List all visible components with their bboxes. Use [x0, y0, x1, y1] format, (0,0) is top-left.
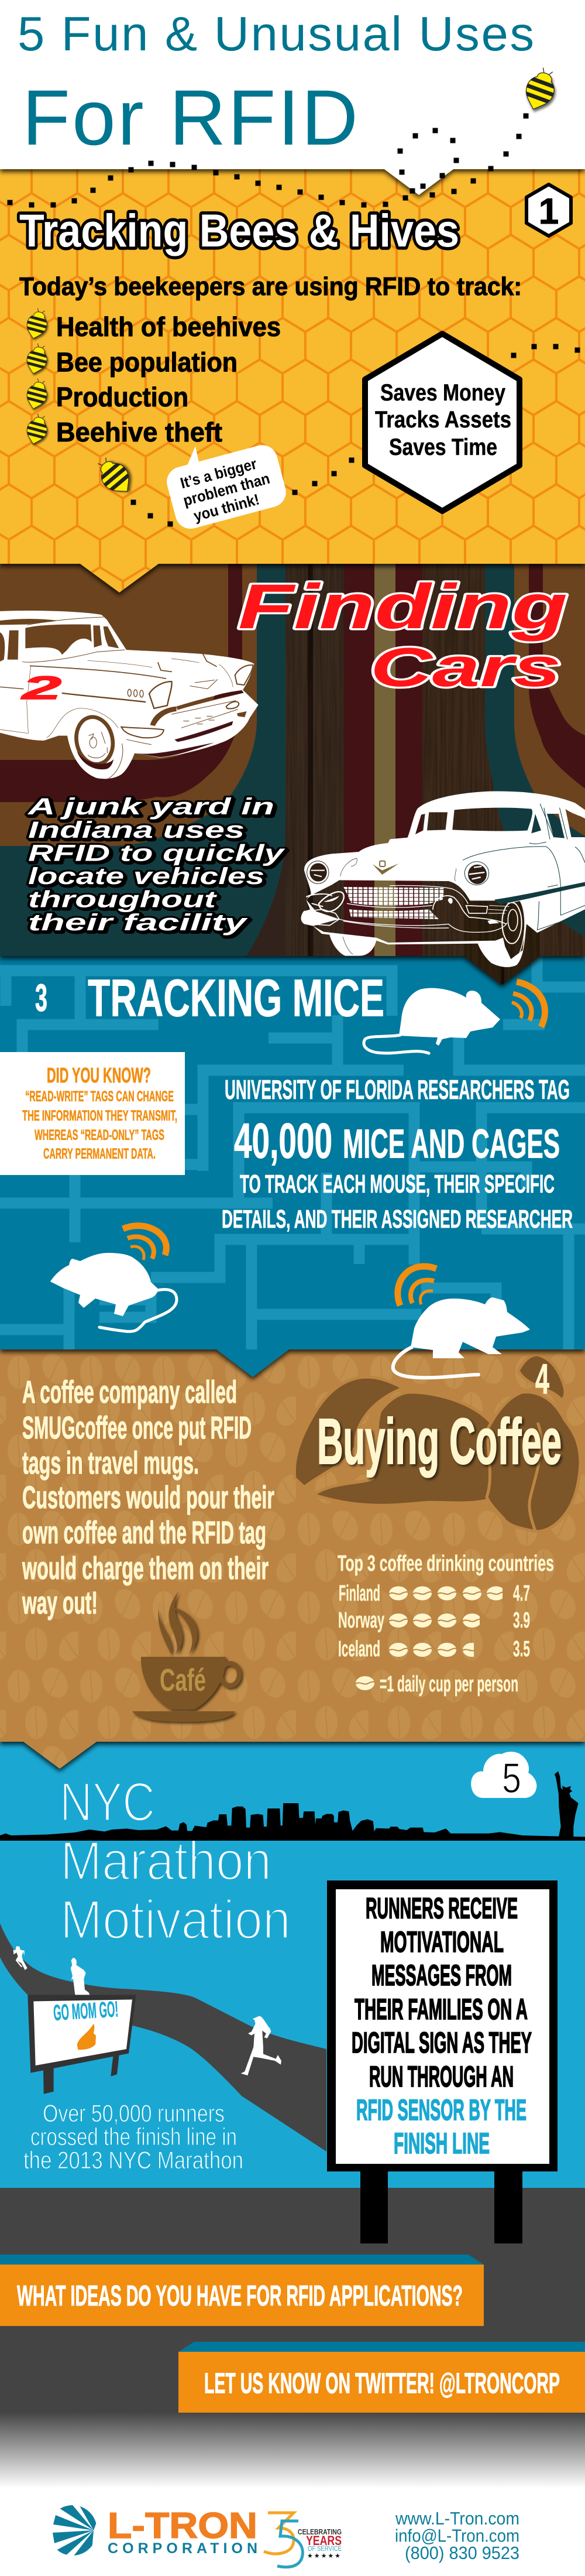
tracking list: [22, 306, 281, 447]
mouse lower right with signal: [393, 1266, 530, 1378]
list item: production: Production: [56, 382, 188, 412]
white background: [0, 0, 585, 195]
anniversary 35 mark: YEARS: [306, 2533, 342, 2548]
corporation word: CORPORATION: [108, 2540, 257, 2557]
heading: finding cars: [238, 571, 567, 698]
hexagon: benefits: Saves Money: [380, 380, 506, 406]
speech bubble: problem than: [181, 470, 271, 509]
did you know box: DID YOU KNOW?: [47, 1063, 151, 1087]
did you know box: [0, 1052, 185, 1175]
number 4: 4: [535, 1356, 549, 1403]
cloud with number 5: [471, 1752, 536, 1802]
panel: buying coffee: [0, 1349, 585, 1769]
right dotted trail: [511, 344, 580, 358]
stripes and wood: [0, 564, 585, 989]
cloud with number 5: 5: [502, 1755, 521, 1802]
maze lines: [0, 956, 585, 1349]
large coffee beans: [294, 1355, 580, 1532]
anniversary 35 mark: ★★★★★: [307, 2553, 340, 2560]
junk yard description: Indiana uses: [28, 817, 245, 843]
runners statistic: crossed the finish line in: [30, 2123, 237, 2150]
callout bar: ideas question: [0, 2255, 484, 2326]
big sign: FINISH LINE: [394, 2127, 490, 2160]
road: [0, 1923, 326, 2152]
panel: tracking bees: [0, 169, 585, 592]
gray ground with fade: [0, 2188, 585, 2488]
title line 2: For RFID: [22, 74, 358, 162]
badge: number 1: 1: [539, 191, 559, 232]
did you know box: THE INFORMATION THEY TRANSMIT,: [22, 1108, 177, 1124]
logo rays icon: [53, 2505, 96, 2556]
hexagon: benefits: Tracks Assets: [375, 407, 511, 433]
florida researchers statement: 40,000: [234, 1114, 332, 1169]
mouse top right with signal: [364, 982, 545, 1053]
heading: NYC Marathon Motivation: [60, 1771, 291, 1950]
junk yard description: throughout: [28, 886, 218, 912]
car: white cadillac: [301, 791, 585, 967]
contact details: [395, 2508, 519, 2563]
junk yard description: A junk yard in: [27, 794, 274, 820]
L-Tron logo: [53, 2505, 342, 2569]
row: Iceland: Iceland: [338, 1637, 380, 1662]
number 3: 3: [35, 976, 47, 1019]
grille: [343, 887, 445, 906]
panel: finding cars: [0, 564, 585, 989]
details: [463, 804, 585, 930]
car: white chevrolet: [0, 611, 259, 779]
heading: finding cars: Finding: [238, 571, 567, 642]
icon: cafe cup: [132, 1591, 239, 1722]
heading: finding cars: Cars: [370, 636, 561, 698]
contact details: www.L-Tron.com: [395, 2508, 519, 2529]
anniversary 35 mark: CELEBRATING: [298, 2527, 342, 2536]
list item: production: [22, 376, 188, 412]
speech bubble: you think!: [192, 491, 261, 525]
row: Iceland: 3.5: [513, 1637, 530, 1662]
title line 1: 5 Fun & Unusual Uses: [18, 6, 534, 61]
shadowed background: [0, 1349, 585, 1769]
hexagon: benefits: [365, 334, 519, 511]
smugcoffee story: SMUGcoffee once put RFID: [22, 1410, 252, 1445]
runners statistic: the 2013 NYC Marathon: [23, 2146, 243, 2174]
small sign: go mom go: [27, 1995, 136, 2094]
row: Finland: 4.7: [513, 1581, 530, 1606]
chart: top 3 coffee drinking countries: [338, 1551, 554, 1697]
row: Finland: Finland: [339, 1581, 380, 1606]
panel: NYC marathon: [0, 1742, 585, 2243]
smugcoffee story: own coffee and the RFID tag: [22, 1515, 266, 1550]
blue background: [0, 1742, 585, 2188]
heading: tracking bees and hives: Tracking Bees & Hives: [19, 204, 459, 256]
heading: NYC Marathon Motivation: Marathon: [60, 1830, 271, 1891]
badge: number 1: [526, 184, 571, 236]
contact details: info@L-Tron.com: [395, 2526, 519, 2546]
junk yard description: locate vehicles: [28, 864, 264, 889]
intro sentence: Today’s beekeepers are using RFID to track:: [19, 272, 522, 301]
anniversary 35 mark: [264, 2513, 342, 2567]
bee flight dotted trail: [7, 114, 529, 527]
list item: population: [22, 341, 238, 377]
legend: [356, 1672, 518, 1697]
shadowed background: [0, 564, 585, 985]
panel: title header: [0, 0, 585, 195]
skyline: [0, 1803, 585, 1841]
row: Finland: [339, 1584, 530, 1601]
small sign: go mom go: GO MOM GO!: [53, 1997, 119, 2026]
shadowed background: [0, 956, 585, 1377]
list item: theft: Beehive theft: [56, 417, 222, 447]
runner medium: [71, 1958, 90, 1995]
junk yard description: their facility: [28, 910, 248, 936]
speech bubble: It’s a bigger: [178, 455, 259, 492]
heading: NYC Marathon Motivation: Motivation: [60, 1889, 291, 1950]
heading: NYC Marathon Motivation: NYC: [60, 1771, 155, 1832]
smugcoffee story: Customers would pour their: [22, 1480, 274, 1515]
honeycomb pattern: [0, 169, 585, 592]
icon: cafe cup: Café: [160, 1663, 206, 1698]
runners statistic: Over 50,000 runners: [43, 2099, 225, 2127]
bean pattern: [0, 1349, 585, 1769]
heading: tracking mice: TRACKING MICE: [88, 970, 384, 1028]
junk yard description: RFID to quickly: [28, 841, 285, 866]
smugcoffee story: would charge them on their: [22, 1551, 269, 1586]
panel: tracking mice: [0, 956, 585, 1378]
did you know box: CARRY PERMANENT DATA.: [43, 1146, 156, 1162]
row: Norway: Norway: [338, 1608, 384, 1633]
runner large: [241, 2016, 281, 2075]
list item: health: Health of beehives: [56, 311, 281, 342]
junk yard description: [27, 794, 285, 936]
row: Norway: [339, 1612, 530, 1632]
did you know box: WHEREAS “READ-ONLY” TAGS: [35, 1127, 164, 1143]
bee on honeycomb: [90, 451, 139, 501]
row: Iceland: [339, 1640, 530, 1657]
statue of liberty: [555, 1771, 579, 1841]
company name: L-TRON: [108, 2506, 257, 2546]
mouse lower left with signal: [50, 1226, 177, 1331]
smugcoffee story: [22, 1375, 274, 1621]
shadowed background: [0, 169, 585, 592]
list item: population: Bee population: [56, 347, 238, 377]
smugcoffee story: tags in travel mugs.: [22, 1445, 199, 1481]
smugcoffee story: A coffee company called: [22, 1375, 237, 1410]
big sign: [327, 1880, 558, 2243]
did you know box: “READ-WRITE” TAGS CAN CHANGE: [25, 1088, 174, 1105]
runner small: [13, 1946, 27, 1970]
speech bubble: [163, 441, 290, 532]
anniversary 35 mark: OF SERVICE: [308, 2544, 342, 2553]
footer panel: [0, 2188, 585, 2571]
wheel: [72, 714, 123, 779]
smugcoffee story: way out!: [22, 1585, 98, 1621]
hexagon: benefits: Saves Time: [389, 434, 497, 460]
row: Norway: 3.9: [513, 1608, 530, 1633]
runners statistic: [23, 2099, 243, 2174]
callout bar: twitter: [178, 2342, 585, 2413]
flying bee: [518, 64, 563, 115]
number 2: 2: [21, 669, 61, 706]
florida researchers statement: [222, 1074, 573, 1234]
contact details: (800) 830 9523: [405, 2543, 519, 2563]
